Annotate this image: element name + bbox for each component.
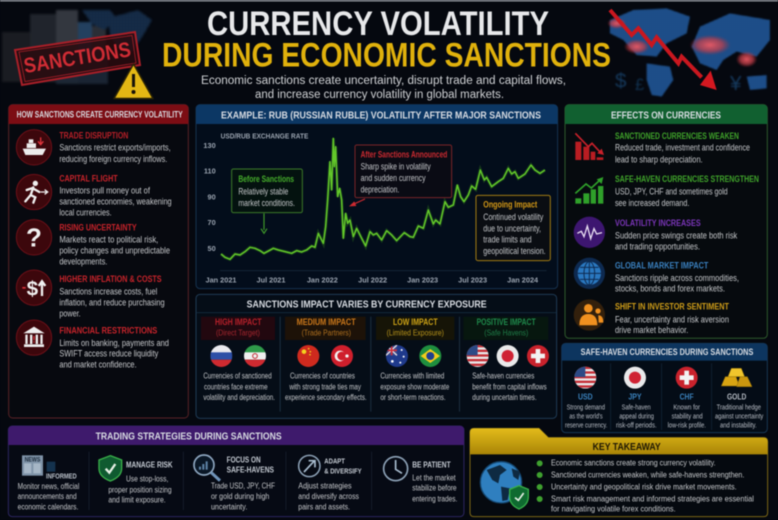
item: volatility increases: and trading opportunities. — [615, 241, 700, 251]
panel header: TRADING STRATEGIES DURING SANCTIONS — [96, 431, 282, 442]
line chart: USD/RUB exchange rate: Jul 2022 — [358, 275, 387, 284]
strategy: stay informed — [18, 455, 80, 511]
item: volatility increases: Sudden price swings create both risk — [615, 230, 738, 240]
strategy: manage risk: and limit exposure. — [108, 496, 166, 505]
strategy: be patient: entering trades. — [412, 494, 457, 503]
subtitle: and increase currency volatility in global markets. — [255, 89, 504, 101]
icon: globe with shield — [480, 462, 528, 509]
line chart: USD/RUB exchange rate: 70 — [208, 218, 216, 227]
column: medium impact — [285, 317, 367, 402]
strategy: focus on safe-havens — [194, 455, 275, 511]
header image: containers and world map — [2, 10, 152, 84]
item: capital flight: CAPITAL FLIGHT — [59, 174, 118, 184]
item: volatility increases — [574, 217, 738, 251]
header image: world map with falling red arrow: ¥ — [729, 72, 742, 95]
item: financial restrictions — [16, 320, 169, 370]
column: high impact — [201, 317, 275, 402]
strategy: adapt and diversify: & DIVERSIFY — [324, 467, 362, 476]
panel header: EXAMPLE: RUB (RUSSIAN RUBLE) VOLATILITY AFTER MAJOR SANCTIONS — [221, 110, 541, 121]
column: high impact: countries face extreme — [204, 382, 268, 391]
heading: SANCTIONS IMPACT VARIES BY CURRENCY EXPOSURE — [247, 299, 487, 310]
strategy: adapt and diversify: and diversify across — [298, 492, 359, 501]
column: positive impact: during uncertain times. — [472, 393, 537, 402]
strategy: adapt and diversify — [298, 455, 362, 511]
panel: RUB volatility example — [196, 105, 558, 289]
strategy: manage risk — [99, 456, 173, 505]
callout: ongoing impact: Continued volatility — [483, 212, 544, 222]
bullet list: for navigating volatile forex conditions. — [551, 504, 676, 513]
panel: key takeaway — [470, 428, 768, 517]
column: low impact: Currencies with limited — [380, 372, 444, 381]
panel header — [196, 105, 558, 124]
column: medium impact: Currencies of countries — [290, 372, 355, 381]
bullet list: Sanctioned currencies weaken, while safe-havens strengthen. — [551, 470, 744, 479]
line chart: USD/RUB exchange rate: 90 — [208, 192, 216, 201]
bullet list — [537, 459, 754, 513]
item: higher inflation and costs: inflation, and reduce purchasing — [59, 297, 165, 307]
panel header: EFFECTS ON CURRENCIES — [611, 110, 721, 121]
column: low impact: or short-term reactions. — [380, 393, 446, 402]
callout: ongoing impact — [476, 195, 550, 261]
strategy: stay informed: Monitor news, official — [18, 482, 80, 491]
item: higher inflation and costs: power. — [59, 308, 81, 318]
currency: JPY: JPY — [628, 392, 642, 402]
strategy: stay informed: INFORMED — [46, 472, 77, 481]
strategy: focus on safe-havens: SAFE-HAVENS — [227, 466, 275, 475]
panel: how sanctions create currency volatility — [9, 105, 188, 418]
item: capital flight: Investors pull money out of — [59, 186, 150, 196]
item: capital flight: local currencies. — [59, 207, 112, 217]
currency: JPY: appeal during — [619, 411, 654, 420]
column: medium impact: experience secondary effects. — [285, 393, 367, 402]
callout: before sanctions — [232, 169, 302, 233]
header image: world map with falling red arrow — [607, 8, 770, 97]
item: shift in investor sentiment: drive market behavior. — [615, 325, 688, 335]
column: medium impact: with strong trade ties may — [289, 382, 361, 391]
currency: JPY: Safe-haven — [622, 402, 651, 411]
strategy: manage risk: proper position sizing — [108, 485, 172, 494]
currency: gold: and instability. — [720, 420, 757, 429]
currency: CHF — [668, 367, 706, 429]
panel header — [562, 343, 767, 361]
currency: CHF: stability and — [672, 411, 703, 420]
item: higher inflation and costs: $ — [27, 277, 39, 300]
strategy: be patient — [384, 457, 457, 503]
item: higher inflation and costs — [16, 270, 165, 318]
header image: world map with falling red arrow: $ — [615, 69, 627, 92]
currency: USD: as the world's — [569, 411, 603, 420]
icon: warning triangle — [114, 64, 153, 98]
item: volatility increases: VOLATILITY INCREASES — [615, 218, 701, 228]
column: high impact: volatility and depreciation. — [203, 393, 275, 402]
column: medium impact: MEDIUM IMPACT — [297, 317, 356, 327]
item: trade disruption: TRADE DISRUPTION — [59, 130, 128, 140]
item: financial restrictions: FINANCIAL RESTRICTIONS — [59, 326, 157, 336]
line chart: USD/RUB exchange rate: Jul 2021 — [257, 275, 285, 284]
column: low impact: (Limited Exposure) — [387, 329, 444, 338]
panel header — [565, 105, 767, 124]
callout: before sanctions: market conditions. — [238, 198, 295, 208]
subtitle: Economic sanctions create uncertainty, disrupt trade and capital flows, — [201, 75, 566, 87]
column: high impact: Currencies of sanctioned — [203, 372, 272, 381]
callout: ongoing impact: due to uncertainty, — [483, 223, 541, 233]
currency: JPY: risk-off periods. — [616, 420, 657, 429]
strategy: manage risk: MANAGE RISK — [126, 461, 173, 470]
column: positive impact — [463, 317, 549, 402]
strategy: focus on safe-havens: Trade USD, JPY, CHF — [211, 481, 275, 490]
panel: sanctions impact by currency exposure — [196, 294, 557, 418]
item: financial restrictions: and market confidence. — [59, 360, 137, 370]
item: global market impact: GLOBAL MARKET IMPACT — [615, 261, 709, 271]
callout: after sanctions announced — [349, 145, 452, 206]
item: safe-haven currencies strengthen: USD, JPY, CHF and sometimes gold — [615, 187, 728, 197]
column: positive impact: Safe-haven currencies — [472, 372, 534, 381]
item: shift in investor sentiment — [574, 299, 729, 335]
item: global market impact: stocks, bonds and forex markets. — [615, 284, 725, 294]
panel header: HOW SANCTIONS CREATE CURRENCY VOLATILITY — [17, 110, 183, 120]
currency: gold: Traditional hedge — [717, 402, 761, 411]
line chart: USD/RUB exchange rate: 130 — [203, 141, 216, 150]
line chart: USD/RUB exchange rate: 50 — [208, 244, 216, 253]
line chart: USD/RUB exchange rate: USD/RUB EXCHANGE RATE — [221, 131, 308, 140]
item: shift in investor sentiment: Fear, uncertainty and risk aversion — [615, 314, 729, 324]
item: rising uncertainty: ? — [26, 223, 42, 253]
item: global market impact — [574, 258, 739, 294]
item: safe-haven currencies strengthen — [575, 174, 759, 208]
panel: trading strategies — [8, 426, 464, 517]
line chart: USD/RUB exchange rate — [203, 131, 547, 284]
currency: JPY — [616, 367, 657, 429]
item: rising uncertainty — [16, 220, 170, 267]
callout: after sanctions announced: depreciation. — [361, 184, 399, 194]
item: capital flight: sanctioned economies, weakening — [59, 197, 172, 207]
item: global market impact: Sanctions ripple across commodities, — [615, 273, 739, 283]
column: positive impact: benefit from capital inflows — [472, 382, 547, 391]
line chart: USD/RUB exchange rate: Jul 2023 — [458, 275, 487, 284]
item: trade disruption — [16, 130, 171, 165]
subtitle — [201, 75, 566, 101]
strategy: be patient: BE PATIENT — [412, 461, 451, 470]
item: rising uncertainty: RISING UNCERTAINTY — [59, 222, 137, 232]
currency: gold — [715, 368, 764, 429]
column: low impact: LOW IMPACT — [393, 317, 438, 327]
bullet list: Economic sanctions create strong currency volatility. — [551, 459, 716, 468]
currency: CHF: Known for — [673, 402, 700, 411]
column: low impact — [376, 317, 454, 402]
stamp: sanctions: SANCTIONS — [22, 38, 132, 78]
item: capital flight — [16, 174, 172, 217]
line chart: USD/RUB exchange rate: 110 — [204, 167, 216, 176]
item: rising uncertainty: policy changes and unpredictable — [59, 245, 170, 255]
callout: ongoing impact: Ongoing Impact — [483, 199, 537, 209]
strategy: adapt and diversify: pairs and assets. — [298, 502, 350, 511]
panel: safe-haven currencies — [562, 343, 767, 433]
panel header — [9, 105, 188, 124]
strategy: adapt and diversify: Adjust strategies — [298, 481, 352, 490]
strategy: be patient: Let the market — [412, 474, 456, 483]
item: trade disruption: reducing foreign currency inflows. — [59, 154, 167, 164]
currency: gold: against uncertainty — [715, 411, 764, 420]
strategy: stay informed: announcements and — [18, 492, 77, 501]
item: financial restrictions: SWIFT access reduce liquidity — [59, 349, 159, 359]
bullet list: Smart risk management and informed strategies are essential — [551, 494, 754, 503]
line chart: USD/RUB exchange rate: Jan 2023 — [407, 275, 438, 284]
item: shift in investor sentiment: SHIFT IN INVESTOR SENTIMENT — [615, 302, 729, 312]
title: CURRENCY VOLATILITY — [207, 5, 549, 43]
title — [162, 5, 611, 74]
currency: USD: reserve currency. — [565, 420, 607, 429]
item: sanctioned currencies weaken: lead to sharp depreciation. — [615, 154, 703, 164]
callout: ongoing impact: trade limits and — [483, 235, 532, 245]
currency: CHF: low-risk profile. — [668, 420, 706, 429]
column: low impact: exposure show moderate — [380, 382, 450, 391]
bullet list: Uncertainty and geopolitical risk drive market movements. — [551, 482, 737, 491]
strategy: focus on safe-havens: or gold during high — [211, 492, 269, 501]
callout: before sanctions: Before Sanctions — [238, 174, 294, 184]
column: high impact: HIGH IMPACT — [215, 317, 262, 327]
currency: gold: GOLD — [727, 392, 746, 402]
line chart: USD/RUB exchange rate: Jan 2022 — [307, 275, 338, 284]
line chart: USD/RUB exchange rate: Jan 2024 — [507, 275, 539, 284]
strategy: adapt and diversify: ADAPT — [324, 456, 345, 465]
title: DURING ECONOMIC SANCTIONS — [162, 36, 611, 74]
item: rising uncertainty: Markets react to political risk, — [59, 235, 158, 245]
item: higher inflation and costs: HIGHER INFLATION & COSTS — [59, 274, 162, 284]
column: positive impact: (Safe Havens) — [484, 329, 529, 338]
panel header — [8, 426, 464, 445]
item: sanctioned currencies weaken: SANCTIONED CURRENCIES WEAKEN — [615, 131, 739, 141]
line chart: USD/RUB exchange rate: Jan 2021 — [206, 275, 236, 284]
panel header — [470, 428, 768, 454]
callout: after sanctions announced: and sudden currency — [361, 173, 426, 183]
icon: falling red arrow — [610, 10, 717, 90]
item: rising uncertainty: developments. — [59, 257, 107, 267]
header image: world map with falling red arrow: £ — [635, 75, 644, 94]
item: sanctioned currencies weaken — [575, 131, 750, 164]
callout: after sanctions announced: After Sanctions Announced — [361, 149, 447, 159]
currency: USD: Strong demand — [567, 402, 605, 411]
currency: USD: USD — [578, 392, 593, 402]
callout: after sanctions announced: Sharp spike in volatility — [361, 161, 431, 171]
item: safe-haven currencies strengthen: see increased demand. — [615, 198, 689, 208]
currency: CHF: CHF — [680, 392, 694, 402]
column: positive impact: POSITIVE IMPACT — [477, 317, 536, 327]
currency: USD — [565, 367, 607, 429]
item: trade disruption: Sanctions restrict exports/imports, — [59, 143, 171, 153]
item: financial restrictions: Limits on banking, payments and — [59, 338, 169, 348]
strategy: focus on safe-havens: FOCUS ON — [227, 456, 261, 465]
strategy: focus on safe-havens: uncertainty. — [211, 502, 247, 511]
callout: before sanctions: Relatively stable — [238, 187, 288, 197]
item: higher inflation and costs: Sanctions increase costs, fuel — [59, 286, 157, 296]
strategy: stay informed: NEWS — [25, 457, 40, 463]
panel: effects on currencies — [565, 105, 767, 338]
callout: ongoing impact: geopolitical tension. — [483, 246, 546, 256]
strategy: be patient: stabilize before — [412, 484, 457, 493]
strategy: stay informed: economic calendars. — [18, 502, 78, 511]
column: high impact: (Direct Target) — [216, 329, 260, 338]
panel header: KEY TAKEAWAY — [593, 442, 661, 453]
strategy: manage risk: Use stop-loss, — [126, 475, 168, 484]
column: medium impact: (Trade Partners) — [302, 329, 351, 338]
